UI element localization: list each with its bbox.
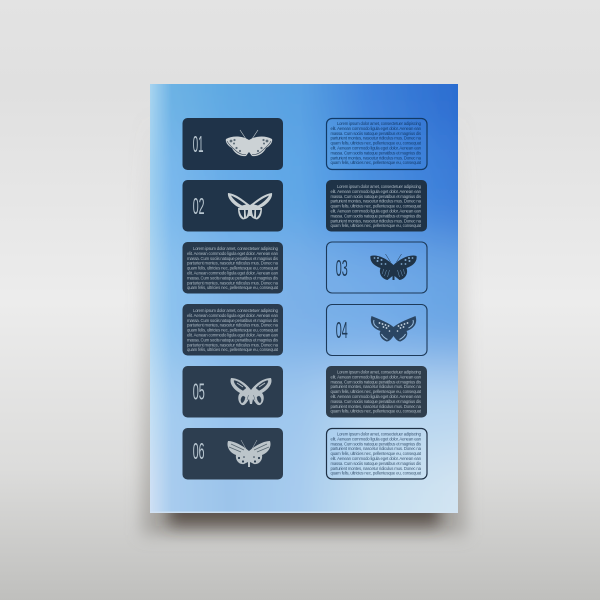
body text: elit. Aenean commodo ligula eget dolor. Aenean ean (330, 394, 422, 399)
body text: elit. Aenean commodo ligula eget dolor. Aenean ean (330, 374, 422, 379)
panel: outlined text block right 1 (326, 118, 427, 170)
body text: parturient montes, nascetur ridiculus mus. Donec na (330, 155, 422, 160)
body text: parturient montes, nascetur ridiculus mus. Donec na (330, 404, 422, 409)
body text: elit. Aenean commodo ligula eget dolor. Aenean ean (330, 456, 422, 461)
body text: Lorem ipsum dolor amet, consectetuer adipiscing (193, 246, 279, 251)
body text (187, 308, 279, 352)
number 01: 01 (193, 131, 203, 157)
icon: butterfly 3 (370, 254, 417, 280)
body text: elit. Aenean commodo ligula eget dolor. Aenean ean (187, 251, 279, 256)
body text: quam felis, ultricies nec, pellentesque eu, consequat (330, 389, 422, 394)
body text: Lorem ipsum dolor amet, consectetuer adipiscing (337, 184, 422, 189)
body text: massa. Cum sociis natoque penatibus et magnius dis (187, 337, 278, 342)
body text: Lorem ipsum dolor amet, consectetuer adipiscing (337, 432, 422, 436)
body text: massa. Cum sociis natoque penatibus et magnius dis (330, 379, 421, 384)
icon: butterfly 5 (230, 378, 272, 405)
body text: quam felis, ultricies nec, pellentesque eu, consequat (187, 347, 279, 352)
body text: massa. Cum sociis natoque penatibus et magnius dis (330, 150, 421, 155)
poster sheet with blue gradient (150, 84, 458, 513)
panel: dark text block right 2 (326, 180, 427, 232)
number 06: 06 (193, 438, 204, 464)
panel: text block left 2 (182, 304, 283, 356)
body text: elit. Aenean commodo ligula eget dolor. Aenean ean (330, 189, 422, 194)
body text: elit. Aenean commodo ligula eget dolor. Aenean ean (187, 332, 279, 338)
body text: parturient montes, nascetur ridiculus mus. Donec na (330, 136, 422, 141)
panel 01: number and butterfly (182, 118, 283, 170)
body text: quam felis, ultricies nec, pellentesque eu, consequat (187, 285, 279, 290)
body text: parturient montes, nascetur ridiculus mus. Donec na (330, 218, 422, 223)
number 02: 02 (193, 193, 204, 219)
body text: Lorem ipsum dolor amet, consectetuer adipiscing (193, 308, 279, 313)
body text: parturient montes, nascetur ridiculus mus. Donec na (330, 466, 422, 471)
body text: massa. Cum sociis natoque penatibus et magnius dis (330, 399, 421, 404)
panel 02: number and butterfly (182, 180, 283, 232)
body text: massa. Cum sociis natoque penatibus et magnius dis (330, 131, 421, 136)
panel 06: number and butterfly (182, 428, 283, 480)
body text: quam felis, ultricies nec, pellentesque eu, consequat (330, 451, 422, 456)
body text: massa. Cum sociis natoque penatibus et magnius dis (187, 318, 278, 323)
number 03: 03 (336, 255, 348, 281)
body text: quam felis, ultricies nec, pellentesque eu, consequat (330, 471, 422, 476)
body text: elit. Aenean commodo ligula eget dolor. Aenean ean (330, 208, 422, 214)
icon: butterfly 2 (228, 193, 272, 220)
body text: massa. Cum sociis natoque penatibus et magnius dis (187, 275, 278, 280)
body text (330, 121, 422, 165)
body text: quam felis, ultricies nec, pellentesque eu, consequat (187, 266, 279, 271)
body text (330, 184, 422, 228)
body text: quam felis, ultricies nec, pellentesque eu, consequat (330, 160, 422, 165)
panel: text block left 1 (182, 242, 283, 294)
body text: massa. Cum sociis natoque penatibus et magnius dis (330, 213, 421, 218)
body text (330, 370, 422, 414)
body text: massa. Cum sociis natoque penatibus et magnius dis (330, 194, 421, 199)
icon: butterfly 1 (226, 130, 272, 156)
body text: parturient montes, nascetur ridiculus mus. Donec na (330, 384, 422, 389)
body text: parturient montes, nascetur ridiculus mus. Donec na (330, 446, 422, 451)
panel: outlined text block right 6 (326, 428, 427, 479)
panel: dark text block right 5 (326, 366, 427, 418)
body text: quam felis, ultricies nec, pellentesque eu, consequat (187, 328, 279, 333)
panel 03: outlined number and butterfly (326, 242, 427, 293)
panel 05: number and butterfly (182, 366, 283, 418)
body text: Lorem ipsum dolor amet, consectetuer adipiscing (337, 121, 422, 126)
poster shadow (142, 110, 466, 535)
body text: elit. Aenean commodo ligula eget dolor. Aenean ean (187, 270, 279, 276)
body text: massa. Cum sociis natoque penatibus et magnius dis (187, 256, 278, 261)
icon: butterfly 4 (371, 316, 416, 342)
body text: quam felis, ultricies nec, pellentesque eu, consequat (330, 141, 422, 146)
body text: elit. Aenean commodo ligula eget dolor. Aenean ean (330, 436, 422, 441)
body text: quam felis, ultricies nec, pellentesque eu, consequat (330, 409, 422, 414)
body text: parturient montes, nascetur ridiculus mus. Donec na (187, 280, 279, 285)
body text: massa. Cum sociis natoque penatibus et magnius dis (330, 441, 421, 446)
body text: massa. Cum sociis natoque penatibus et magnius dis (330, 461, 421, 466)
icon: butterfly 6 (227, 440, 271, 467)
body text: elit. Aenean commodo ligula eget dolor. Aenean ean (187, 313, 279, 318)
number 04: 04 (336, 318, 348, 343)
panel 04: outlined number and butterfly (326, 304, 427, 356)
number 05: 05 (193, 379, 205, 404)
body text: elit. Aenean commodo ligula eget dolor. Aenean ean (330, 146, 422, 150)
body text: quam felis, ultricies nec, pellentesque eu, consequat (330, 223, 422, 228)
body text: elit. Aenean commodo ligula eget dolor. Aenean ean (330, 126, 422, 131)
body text: Lorem ipsum dolor amet, consectetuer adipiscing (337, 370, 422, 374)
body text (187, 246, 279, 290)
body text: parturient montes, nascetur ridiculus mus. Donec na (187, 261, 279, 266)
body text (330, 432, 422, 476)
body text: parturient montes, nascetur ridiculus mus. Donec na (187, 323, 279, 328)
body text: quam felis, ultricies nec, pellentesque eu, consequat (330, 204, 422, 209)
body text: parturient montes, nascetur ridiculus mus. Donec na (330, 199, 422, 204)
body text: parturient montes, nascetur ridiculus mus. Donec na (187, 342, 279, 347)
